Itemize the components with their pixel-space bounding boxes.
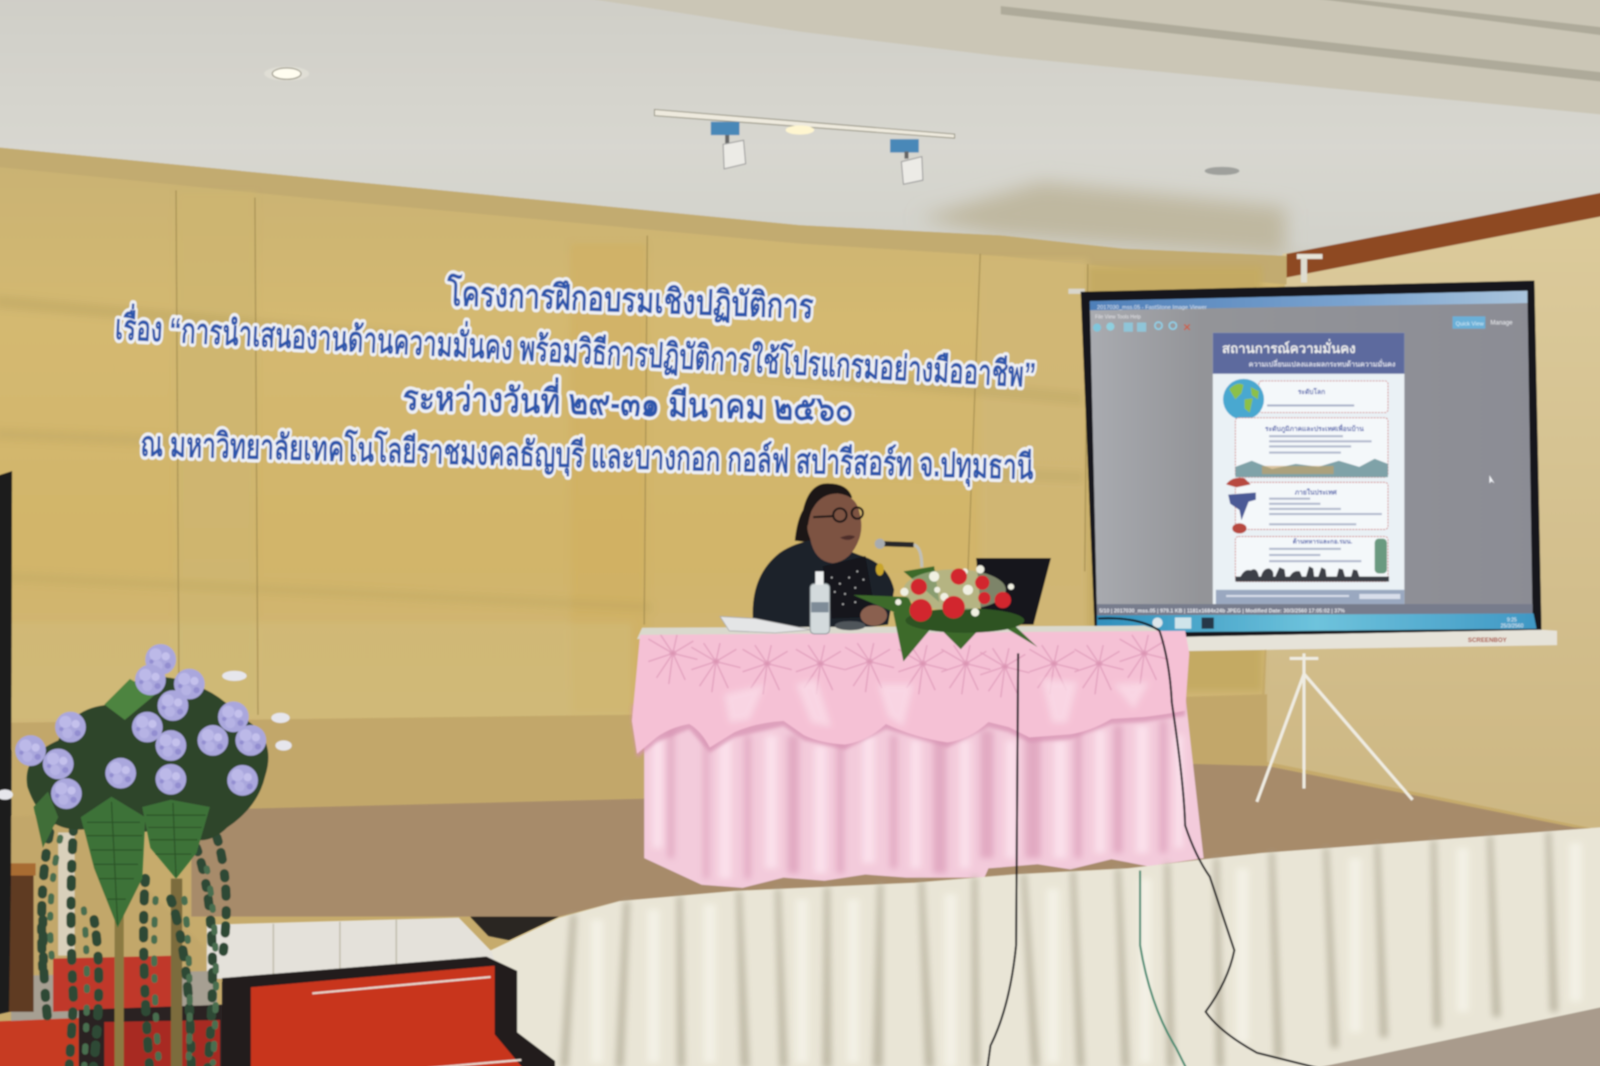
- fern fronds: [34, 679, 210, 928]
- panel: regional level: [1235, 418, 1388, 477]
- document header: สถานการณ์ความมั่นคง: [1222, 338, 1356, 356]
- banner line 1: project title: โครงการฝึกอบรมเชิงปฏิบัติการ: [445, 272, 814, 327]
- track spotlights: [711, 122, 923, 184]
- document header: ความเปลี่ยนแปลงและผลกระทบด้านความมั่นคง: [1249, 359, 1396, 369]
- toolbar icons: Quick View: [1456, 322, 1485, 328]
- screen roller tube: [1068, 289, 1085, 294]
- water bottle: [810, 571, 830, 634]
- gold flower stand poles: [58, 833, 182, 1066]
- purple hydrangea blooms: [15, 644, 266, 809]
- status bar: [1097, 604, 1532, 616]
- panel: military section: ด้านทหารและกอ.รมน.: [1293, 538, 1353, 546]
- lower wall: [0, 694, 1267, 981]
- left base and pedestal: [7, 863, 217, 1066]
- toolbar icons: [1093, 316, 1513, 335]
- panel: military section: [1235, 537, 1389, 582]
- dark strip under stage edge: [470, 917, 559, 940]
- status bar: 5/10 | 2017030_mss.05 | 979.1 KB | 1181x1684x24b JPEG | Modified Date: 30/3/2560 17:05:02 | 37%: [1099, 608, 1345, 614]
- stage floor: [191, 764, 1600, 917]
- gathered bow knots: [648, 635, 1169, 697]
- pink swags: [632, 631, 1189, 754]
- taskbar: [1097, 613, 1537, 633]
- window title bar: 2017030_mss.05 - FastStone Image Viewer: [1097, 305, 1207, 311]
- toolbar icons: Manage: [1490, 320, 1513, 327]
- document footer: [1216, 590, 1404, 604]
- laptop: [976, 558, 1051, 625]
- bouquet ferns: [853, 566, 1038, 662]
- swag shadow: [632, 694, 1185, 758]
- table bouquet: [853, 565, 1038, 662]
- presenter hair: [795, 483, 852, 543]
- panel: domestic level: ภายในประเทศ: [1295, 488, 1338, 497]
- panel: global level: [1223, 379, 1388, 420]
- stair red treads: [251, 966, 532, 1066]
- banner line 2: topic: เรื่อง “การนำเสนองานด้านความมั่นคง พร้อมวิธีการปฏิบัติการใช้โปรแกรมอย่างมืออาชีพ”: [114, 302, 1037, 395]
- presenter: [753, 483, 894, 633]
- panel: regional level: ระดับภูมิภาคและประเทศเพื่อนบ้าน: [1265, 423, 1364, 434]
- screen frame: [1081, 281, 1542, 639]
- dark foliage: [27, 677, 268, 840]
- red carnations: [910, 568, 1011, 622]
- white satin pleats: [560, 832, 1558, 1066]
- panel: global level: ระดับโลก: [1298, 387, 1325, 396]
- ceiling: [0, 0, 1600, 305]
- screen housing bar: SCREENBOY: [1468, 637, 1507, 644]
- glasses: [813, 507, 863, 522]
- white sprays: [0, 671, 292, 800]
- white baby's breath: [903, 569, 1006, 610]
- taskbar: 9:25: [1507, 618, 1517, 624]
- banner line 4: venue: ณ มหาวิทยาลัยเทคโนโลยีราชมงคลธัญบุรี และบางกอก กอล์ฟ สปารีสอร์ท จ.ปทุมธานี: [140, 423, 1034, 489]
- banner heading text: [114, 272, 1037, 489]
- tripod stand: [1257, 653, 1413, 802]
- red stage steps: [0, 955, 555, 1066]
- toolbar icons: ×: [1183, 320, 1191, 335]
- gold curtain backdrop: [0, 146, 1287, 723]
- banner line 3: dates: ระหว่างวันที่ ๒๙-๓๑ มีนาคม ๒๕๖๐: [402, 373, 854, 429]
- document panel: security situation infographic: [1213, 333, 1404, 604]
- stair black frame: [222, 956, 555, 1066]
- window title bar: [1090, 291, 1527, 320]
- mouse cursor: [1489, 475, 1495, 483]
- window title bar: File View Tools Help: [1095, 314, 1141, 320]
- pink table skirt: [632, 631, 1204, 888]
- right wall: [1262, 190, 1600, 833]
- taskbar: 25/3/2560: [1501, 624, 1524, 630]
- presenter jacket: [753, 539, 894, 633]
- dotted blouse: [822, 556, 874, 619]
- cables: [987, 618, 1318, 1066]
- panel: domestic level: [1226, 478, 1388, 534]
- hand: [860, 605, 887, 626]
- floor bottom right: [1267, 1005, 1600, 1066]
- gold lapel pin: [876, 563, 884, 575]
- left floral arrangement: [0, 644, 292, 1066]
- screen surface: [1090, 291, 1532, 616]
- screen housing bar: [1175, 630, 1557, 651]
- document header: [1213, 333, 1404, 374]
- left black stand: [0, 471, 12, 1017]
- white stage skirt: [207, 826, 1600, 1066]
- projection screen: [1068, 281, 1557, 802]
- table top: [637, 626, 1189, 639]
- lower left red carpet: [0, 1018, 79, 1066]
- papers and mouse: [720, 616, 866, 633]
- hanging ivy: [42, 817, 226, 1066]
- microphone: [875, 539, 922, 567]
- presenter face: [807, 494, 861, 563]
- satin pleats: [668, 720, 1167, 879]
